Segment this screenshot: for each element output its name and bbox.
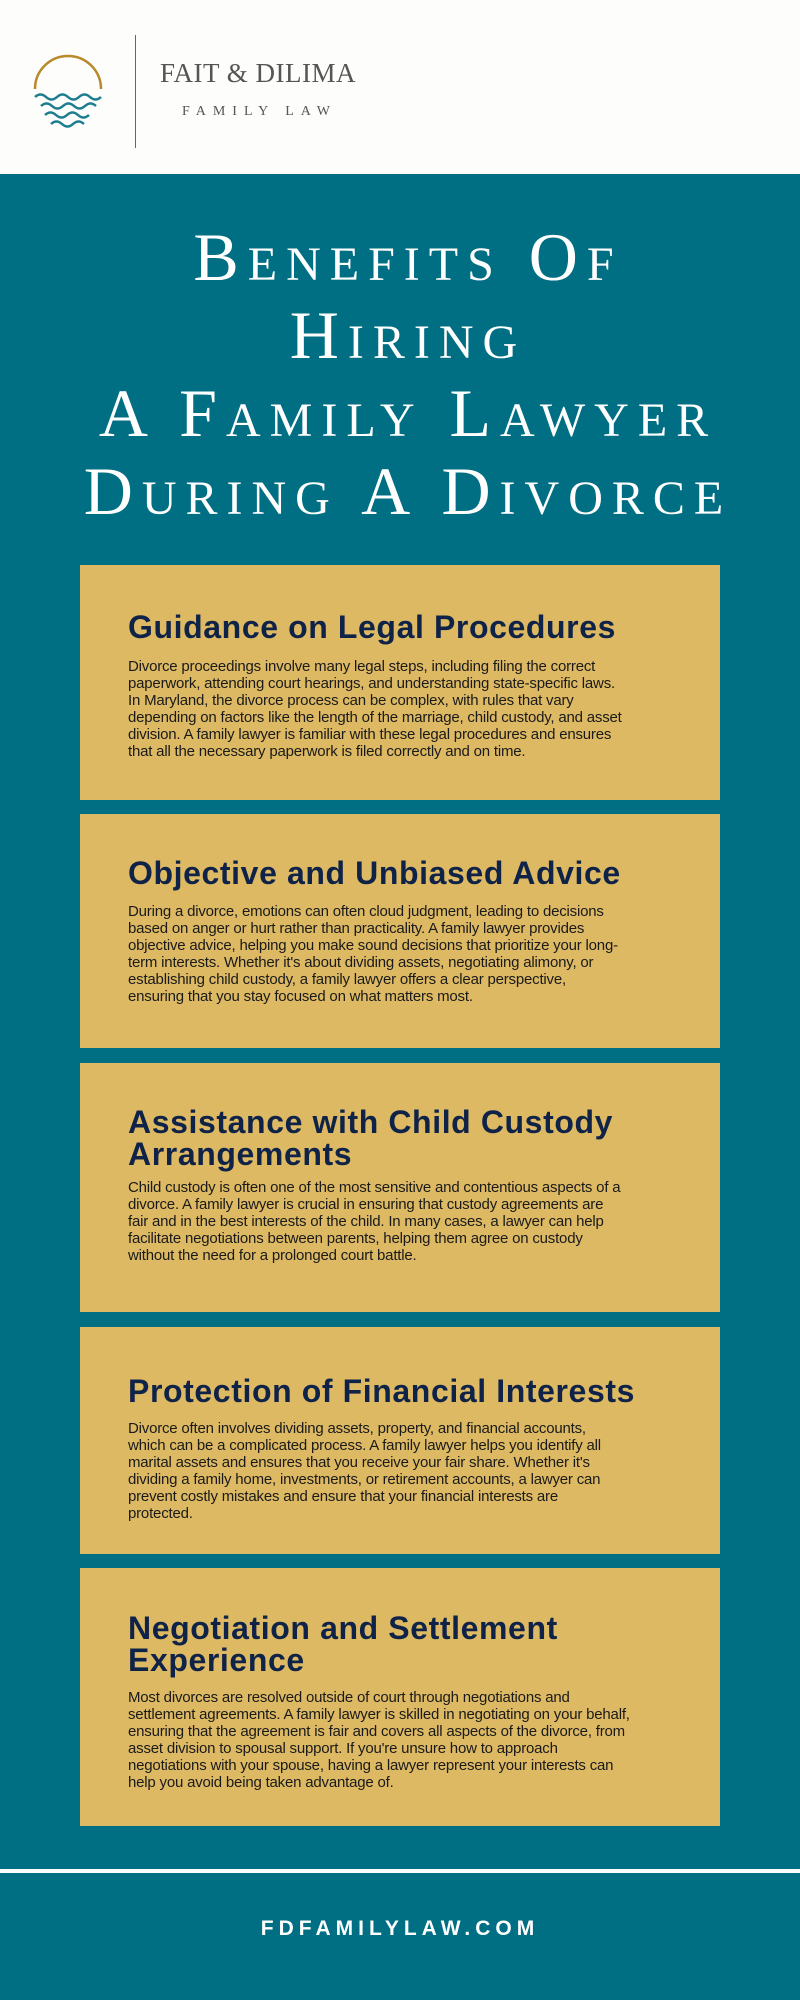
text block: which can be a complicated process. A family lawyer helps you identify all [128, 1437, 601, 1454]
text block: marital assets and ensures that you receive your fair share. Whether it's [128, 1454, 590, 1471]
text block: In Maryland, the divorce process can be complex, with rules that vary [128, 692, 574, 709]
text block: help you avoid being taken advantage of. [128, 1774, 394, 1791]
text block: protected. [128, 1505, 193, 1522]
heading: Guidance on Legal Procedures [128, 609, 616, 645]
title [84, 219, 732, 529]
heading [128, 1610, 558, 1678]
text block: Most divorces are resolved outside of court through negotiations and [128, 1689, 570, 1706]
text block [128, 658, 622, 760]
text block: that all the necessary paperwork is filed correctly and on time. [128, 743, 525, 760]
logo text: FAIT & DILIMA [160, 58, 356, 88]
panel: child custody [80, 1063, 720, 1312]
text block: term interests. Whether it's about dividing assets, negotiating alimony, or [128, 954, 593, 971]
header: FAMILY LAW [182, 104, 337, 119]
title: During A Divorce [84, 453, 732, 529]
title: Benefits Of [193, 219, 623, 295]
text block: objective advice, helping you make sound decisions that prioritize your long- [128, 937, 618, 954]
panel: negotiation [80, 1568, 720, 1826]
panel: financial interests [80, 1327, 720, 1554]
text block: without the need for a prolonged court battle. [128, 1247, 417, 1264]
panel: guidance on legal procedures [80, 565, 720, 800]
text block: depending on factors like the length of the marriage, child custody, and asset [128, 709, 622, 726]
text block: facilitate negotiations between parents, helping them agree on custody [128, 1230, 583, 1247]
text block: based on anger or hurt rather than practicality. A family lawyer provides [128, 920, 584, 937]
footer url: FDFAMILYLAW.COM [261, 1917, 539, 1940]
text block: ensuring that the agreement is fair and covers all aspects of the divorce, from [128, 1723, 625, 1740]
heading: Arrangements [128, 1136, 352, 1172]
text block: division. A family lawyer is familiar with these legal procedures and ensures [128, 726, 611, 743]
text block: settlement agreements. A family lawyer is skilled in negotiating on your behalf, [128, 1706, 630, 1723]
text block: divorce. A family lawyer is crucial in ensuring that custody agreements are [128, 1196, 603, 1213]
text block: establishing child custody, a family lawyer offers a clear perspective, [128, 971, 566, 988]
heading: Protection of Financial Interests [128, 1373, 635, 1409]
heading: Objective and Unbiased Advice [128, 855, 621, 891]
title: A Family Lawyer [99, 375, 717, 451]
text block: Divorce often involves dividing assets, property, and financial accounts, [128, 1420, 586, 1437]
text block: asset division to spousal support. If you're unsure how to approach [128, 1740, 558, 1757]
text block: prevent costly mistakes and ensure that your financial interests are [128, 1488, 558, 1505]
header [0, 0, 800, 174]
text block [128, 1689, 630, 1791]
heading: Experience [128, 1642, 305, 1678]
panel: objective advice [80, 814, 720, 1048]
text block: ensuring that you stay focused on what matters most. [128, 988, 473, 1005]
text block: fair and in the best interests of the child. In many cases, a lawyer can help [128, 1213, 604, 1230]
heading: Negotiation and Settlement [128, 1610, 558, 1646]
text block: Child custody is often one of the most sensitive and contentious aspects of a [128, 1179, 620, 1196]
icon: logo sun over waves [34, 54, 102, 128]
heading [128, 1104, 613, 1172]
text block: Divorce proceedings involve many legal steps, including filing the correct [128, 658, 595, 675]
text block: negotiations with your spouse, having a lawyer represent your interests can [128, 1757, 613, 1774]
title: Hiring [290, 297, 526, 373]
text block: paperwork, attending court hearings, and understanding state-specific laws. [128, 675, 615, 692]
text block: dividing a family home, investments, or retirement accounts, a lawyer can [128, 1471, 600, 1488]
text block [128, 1179, 621, 1264]
text block [128, 903, 618, 1005]
text block [128, 1420, 601, 1522]
heading: Assistance with Child Custody [128, 1104, 613, 1140]
text block: During a divorce, emotions can often cloud judgment, leading to decisions [128, 903, 604, 920]
